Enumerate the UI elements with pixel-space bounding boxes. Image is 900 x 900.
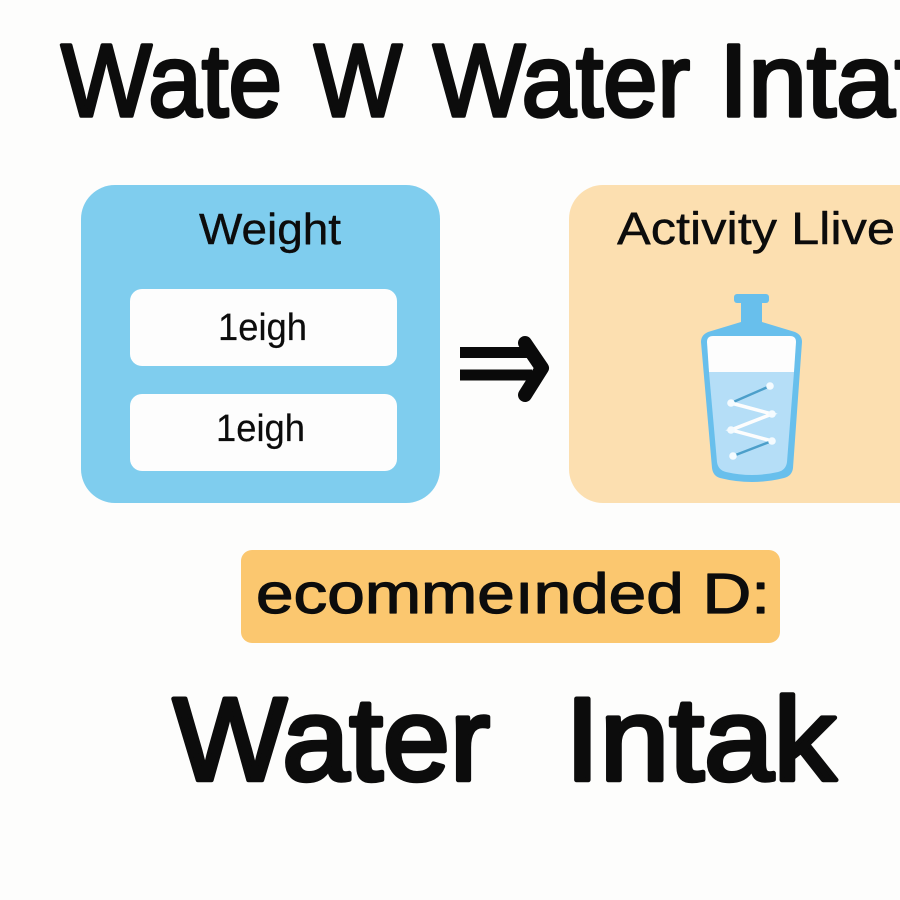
arrow [460, 343, 542, 395]
weight input 2: 1eigh [216, 408, 305, 450]
title [61, 23, 900, 138]
icon: water bottle [701, 294, 802, 482]
result text [173, 674, 837, 806]
molecule zigzag [727, 382, 776, 460]
panel: activity level [569, 185, 900, 503]
weight input 2 [130, 394, 397, 471]
activity heading: Activity Llive [617, 203, 895, 254]
title: W [314, 23, 402, 138]
recommended daily banner [241, 550, 780, 643]
recommended daily banner: ecommeınded D: [256, 562, 770, 626]
weight input 1 [130, 289, 397, 366]
weight input 1: 1eigh [218, 307, 307, 349]
weight heading: Weight [199, 205, 341, 254]
panel: weight [81, 185, 440, 503]
title: Water [433, 23, 690, 138]
title: Wate [61, 23, 282, 138]
result text: Intak [565, 674, 837, 806]
result text: Water [173, 674, 490, 806]
